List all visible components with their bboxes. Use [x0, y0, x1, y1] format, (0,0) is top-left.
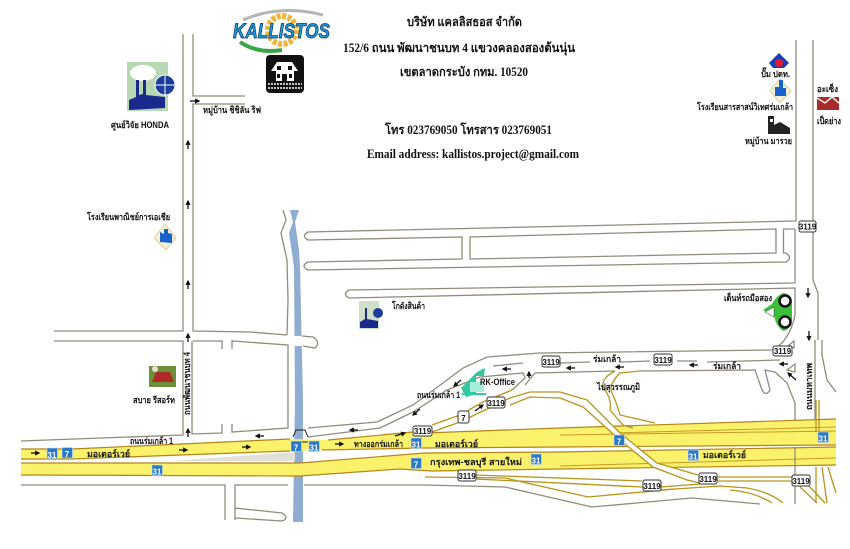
route shields blue: 7 — [617, 438, 622, 446]
route shields blue: 7 — [414, 460, 419, 470]
road labels: ถนนมหาเทพ — [804, 363, 814, 410]
label: RK office: RK-Office — [480, 377, 515, 387]
route shields blue: 31 — [412, 440, 421, 450]
icon: vocational school — [770, 79, 791, 103]
company name and address: Email address: kallistos.project@gmail.com — [367, 147, 580, 161]
icon: Maruay village — [768, 116, 790, 134]
road labels: ร่มเกล้า — [593, 354, 621, 364]
logo: Kallistos: KALLISTOS — [233, 20, 330, 43]
icon: resort — [149, 366, 176, 387]
road labels: ร่มเกล้า — [713, 361, 741, 371]
route shields blue: 7 — [294, 444, 299, 452]
road labels: ถนนร่มเกล้า 1 — [130, 436, 173, 446]
route shields white: 3119 — [774, 347, 792, 356]
route shields white: 3119 — [699, 475, 717, 484]
route shields white: 7 — [461, 414, 466, 423]
route shields blue: 31 — [153, 468, 162, 476]
label: roast duck: เป็ดย่าง — [817, 114, 841, 126]
route shields blue: 7 — [65, 450, 70, 459]
route shields blue: 31 — [48, 451, 57, 460]
route shields white: 3119 — [414, 427, 432, 436]
label: A-Seng: อะเซ็ง — [817, 82, 838, 94]
route shields white: 3119 — [792, 477, 810, 486]
flyover crossing motorway — [560, 392, 700, 483]
label: resort: สบาย รีสอร์ท — [133, 394, 175, 405]
route shields blue: 31 — [819, 434, 828, 444]
company name and address: บริษัท แคลลิสธอส จำกัด — [407, 15, 522, 29]
road labels: มอเตอร์เวย์ — [87, 448, 130, 459]
label: used car tent: เต็นท์รถมือสอง — [724, 291, 772, 303]
road labels: ทางออกร่มเกล้า — [354, 439, 403, 449]
icon: Honda research factory — [127, 62, 175, 111]
road labels — [87, 352, 814, 468]
route shields white: 3119 — [799, 222, 817, 232]
route shields white: 3119 — [643, 482, 661, 491]
label: warehouse: โกดังสินค้า — [391, 300, 425, 311]
direction arrows — [31, 101, 809, 453]
road labels: มอเตอร์เวย์ — [703, 449, 746, 460]
road labels: ถนนพัฒนาชนบท 4 — [182, 352, 192, 415]
label: PTT: ปั๊ม ปตท. — [761, 67, 790, 79]
route shields white: 3119 — [487, 399, 505, 408]
canal crossing under road — [288, 336, 306, 346]
route shields white: 3119 — [458, 472, 476, 481]
road labels: ถนนร่มเกล้า 1 — [417, 390, 460, 400]
route shields blue: 31 — [689, 452, 698, 462]
label: Maruay village: หมู่บ้าน มารวย — [745, 136, 792, 147]
icon: roast duck restaurant — [817, 97, 839, 110]
company name and address: เขตลาดกระบัง กทม. 10520 — [400, 65, 528, 79]
motorway bands — [21, 419, 836, 476]
route shields white: 3119 — [654, 356, 672, 365]
route shields white: 3119 — [542, 358, 560, 367]
company name and address: โทร 023769050 โทรสาร 023769051 — [384, 122, 552, 137]
road labels: มอเตอร์เวย์ — [435, 438, 478, 449]
icon: RK office — [461, 368, 486, 397]
company name and address — [343, 15, 580, 161]
bridge over canal — [293, 430, 308, 442]
canal — [289, 210, 303, 522]
icon: warehouse — [359, 301, 383, 329]
route shields white — [413, 221, 817, 491]
road labels: กรุงเทพ-ชลบุรี สายใหม่ — [430, 456, 522, 468]
route shields blue: 31 — [310, 444, 319, 452]
icon: Asia commercial school — [154, 224, 176, 250]
icon: house — [266, 55, 304, 93]
route shields blue: 31 — [532, 456, 541, 466]
logo: Kallistos — [233, 11, 330, 51]
road labels: ไปสุวรรณภูมิ — [596, 381, 640, 393]
route shields blue — [47, 432, 828, 476]
label: Honda research: ศูนย์วิจัย HONDA — [111, 119, 169, 131]
label: vocational school: โรงเรียนสารสาสน์วิเทศร่มเกล้า — [696, 101, 793, 112]
icon: PTT station — [769, 53, 789, 68]
label: village: หมู่บ้าน ชิชิลัน ริฟ — [203, 105, 261, 116]
label: commercial school: โรงเรียนพาณิชย์การเอเชีย — [86, 211, 170, 222]
company name and address: 152/6 ถนน พัฒนาชนบท 4 แขวงคลองสองต้นนุ่น — [343, 41, 575, 56]
icon: car — [763, 293, 792, 331]
